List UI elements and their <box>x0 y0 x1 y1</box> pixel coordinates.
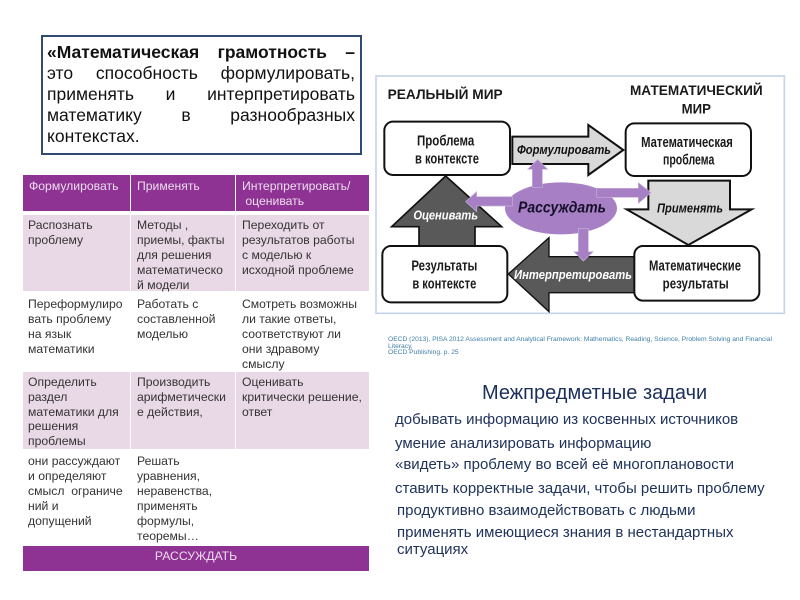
arrow: Оценивать <box>392 176 502 247</box>
item 6: применять имеющиеся знания в нестандартных <box>397 524 733 541</box>
box: Математическая проблема <box>626 123 751 176</box>
header: Формулировать: Формулировать <box>29 179 118 193</box>
ellipse: Рассуждать: Рассуждать <box>518 200 606 217</box>
box: Математические результаты: Математические <box>649 259 741 275</box>
heading: interdisciplinary tasks: Межпредметные задачи <box>482 382 707 404</box>
box: Математическая проблема: Математическая <box>641 135 733 151</box>
box: Результаты в контексте: в контексте <box>412 277 476 293</box>
heading: mathematical world: МАТЕМАТИЧЕСКИЙ <box>630 81 763 98</box>
purple arrow right <box>597 183 651 203</box>
row 1 cell 1 <box>23 215 130 291</box>
arrow: Формулировать: Формулировать <box>517 142 611 157</box>
item 4: ставить корректные задачи, чтобы решить проблему <box>395 480 765 497</box>
arrow: Оценивать: Оценивать <box>413 208 478 223</box>
row 1 cell 2: Методы , приемы, факты для решения математическо й модели <box>137 218 224 292</box>
item 3: «видеть» проблему во всей её многоплановости <box>395 456 734 473</box>
item 1: добывать информацию из косвенных источников <box>395 411 738 428</box>
arrow: Применять: Применять <box>657 200 723 215</box>
arrow: Интерпретировать <box>508 238 636 312</box>
footer band: РАССУЖДАТЬ <box>23 546 369 571</box>
item 2: умение анализировать информацию <box>395 435 651 452</box>
arrow: Формулировать <box>512 125 623 175</box>
heading: mathematical world: МИР <box>682 100 711 116</box>
box: Проблема в контексте: Проблема <box>417 133 475 149</box>
row 3 cell 3 <box>236 372 369 449</box>
list of interdisciplinary skills <box>395 411 765 558</box>
row 2 cell 3: Смотреть возможны ли такие ответы, соответствуют ли они здравому смыслу <box>242 297 357 371</box>
heading: real world: РЕАЛЬНЫЙ МИР <box>388 85 503 102</box>
row 1 cell 3: Переходить от результатов работы с моделью к исходной проблеме <box>242 218 354 277</box>
box: Результаты в контексте <box>382 246 507 302</box>
box: Проблема в контексте: в контексте <box>415 151 479 167</box>
row 2 cell 1: Переформулиро вать проблему на язык математики <box>28 297 122 356</box>
box: Математические результаты: результаты <box>663 277 729 293</box>
source citation: Literacy, <box>388 342 413 350</box>
diagram frame <box>376 76 784 313</box>
arrow: Интерпретировать: Интерпретировать <box>514 267 632 282</box>
row 3 cell 1: Определить раздел математики для решения проблемы <box>28 375 119 448</box>
box: Математическая проблема: проблема <box>663 152 715 168</box>
row 4 cell 2: Решать уравнения, неравенства, применять формулы, теоремы… <box>137 454 212 543</box>
header: Формулировать <box>23 175 130 211</box>
ellipse: Рассуждать <box>505 182 617 234</box>
item 5: продуктивно взаимодействовать с людьми <box>397 502 695 519</box>
source citation: OECD (2013), PISA 2012 Assessment and Analytical Framework: Mathematics, Reading, Science, Problem Solving and Financial <box>388 336 772 343</box>
header: Применять <box>131 175 235 211</box>
row 2 cell 2: Работать с составленной моделью <box>137 297 215 341</box>
row 3 cell 2 <box>131 372 235 449</box>
heading: mathematical world <box>630 81 763 116</box>
source citation: OECD Publishing. p. 25 <box>388 349 459 356</box>
box: Результаты в контексте: Результаты <box>411 259 477 275</box>
purple arrow left <box>466 192 512 212</box>
box: Проблема в контексте <box>384 122 510 175</box>
row 4 cell 1: они рассуждают и определяют смысл ограниче ний и допущений <box>28 454 123 528</box>
source citation <box>388 336 772 356</box>
row 1 cell 1: Распознать проблему <box>28 218 93 247</box>
definition text box <box>41 35 362 155</box>
footer band: РАССУЖДАТЬ: РАССУЖДАТЬ <box>155 549 237 563</box>
definition text box: контекстах. <box>47 126 140 146</box>
header: Интерпретировать <box>236 175 369 211</box>
header: Применять: Применять <box>137 179 200 193</box>
definition text box: применять и интерпретировать <box>47 84 355 104</box>
item 6: ситуациях <box>397 541 468 558</box>
row 3 cell 3: Оценивать критически решение, ответ <box>242 375 362 419</box>
row 1 cell 3 <box>236 215 369 291</box>
row 3 cell 2: Производить арифметически е действия, <box>137 375 226 419</box>
item 6 <box>397 524 734 558</box>
purple arrow up <box>528 159 548 187</box>
box: Математические результаты <box>634 246 759 301</box>
definition text box: это способность формулировать, <box>47 63 355 83</box>
definition text box: математику в разнообразных <box>47 105 355 125</box>
definition text box: «Математическая грамотность – <box>47 42 355 62</box>
header: Интерпретировать: Интерпретировать/ оценивать <box>242 179 350 208</box>
arrow: Применять <box>627 181 752 245</box>
purple arrow down <box>574 228 593 261</box>
